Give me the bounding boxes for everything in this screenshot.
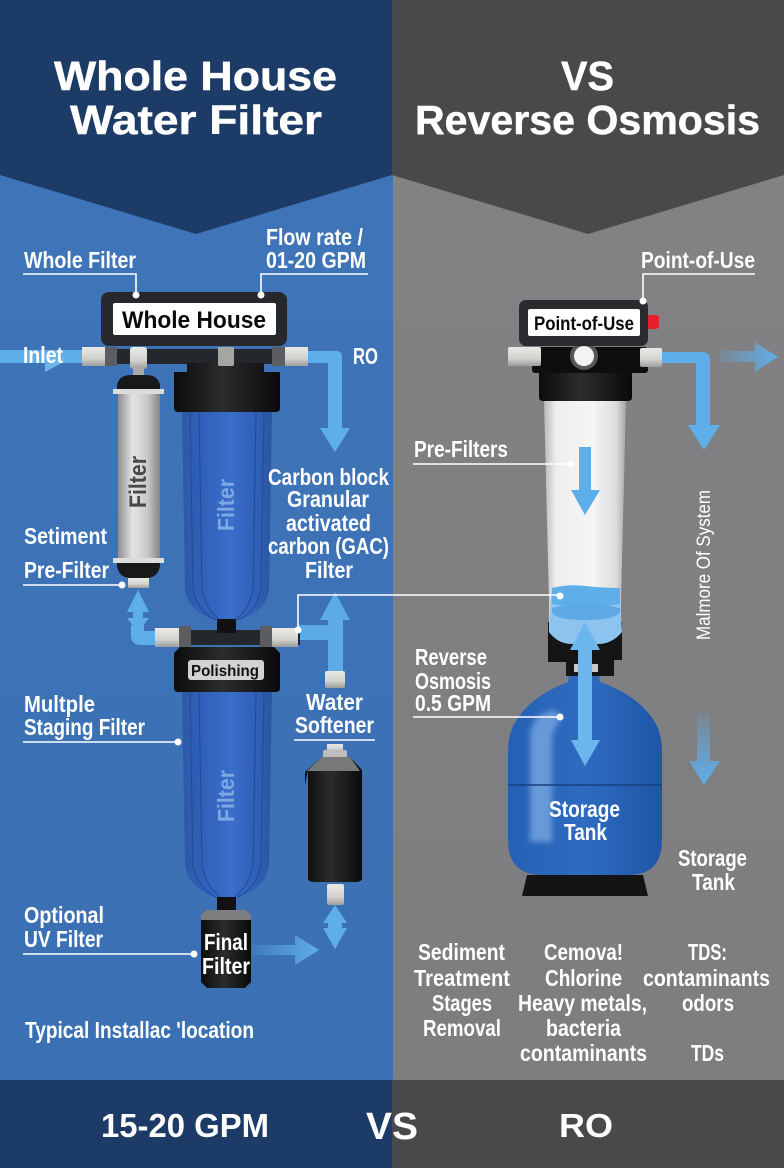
lower manifold	[155, 630, 300, 645]
table column: TDS: odors	[682, 990, 734, 1016]
label: storage tank: Tank	[692, 869, 735, 895]
footer band: right	[392, 1080, 784, 1168]
arrow: up into housing and down into tank	[570, 622, 600, 766]
callout: point-of-use: Point-of-Use	[641, 247, 755, 273]
title: whole house water filter: Whole House	[54, 53, 337, 99]
RO storage tank	[508, 673, 662, 896]
inlet flow pipe	[0, 350, 82, 372]
tank text: Storage	[549, 796, 620, 822]
tank highlight	[530, 710, 559, 842]
fittings	[508, 347, 541, 366]
RO outlet arrow down	[662, 352, 720, 450]
label: storage tank: Storage	[678, 845, 747, 871]
panel: reverse osmosis background	[393, 0, 784, 1168]
panel: whole house background	[0, 0, 393, 1168]
table column: removal: Chlorine	[545, 965, 622, 991]
black lower collar	[548, 622, 622, 676]
title: whole house water filter: Water Filter	[70, 97, 322, 143]
double flow arrow below pre-filter	[127, 590, 149, 632]
table column: sediment	[414, 939, 510, 1041]
callout: reverse osmosis flow: Reverse	[415, 644, 487, 670]
callout: flow rate: Flow rate /	[266, 224, 364, 250]
label: RO: RO	[353, 343, 378, 369]
head	[519, 300, 648, 346]
callout: reverse osmosis flow	[413, 644, 564, 720]
table column: removal: Heavy metals,	[518, 990, 647, 1016]
callout: pre-filters: Pre-Filters	[414, 436, 508, 462]
table column: sediment: Sediment	[418, 939, 505, 965]
final filter: Final	[204, 929, 248, 955]
callout: multiple staging filter	[23, 691, 182, 746]
table column: removal	[518, 939, 647, 1066]
callout: water softener	[294, 689, 375, 740]
sediment pre-filter: Filter	[125, 456, 152, 508]
callout: multiple staging filter: Staging Filter	[24, 714, 145, 740]
label: carbon block: Granular	[287, 486, 369, 512]
label: carbon block: Filter	[305, 557, 353, 583]
table column: sediment: Removal	[423, 1015, 501, 1041]
head label text: Whole House	[122, 307, 266, 334]
double arrow under softener	[323, 905, 347, 949]
label: typical installation location: Typical Installac 'location	[25, 1017, 254, 1043]
fittings	[82, 347, 308, 369]
red nub	[648, 315, 659, 329]
lower RO arrow	[689, 713, 720, 785]
title: vs reverse osmosis: Reverse Osmosis	[415, 97, 760, 143]
table column: removal: Cemova!	[544, 939, 623, 965]
polishing text: Polishing	[191, 663, 259, 680]
table column: TDS	[643, 939, 770, 1066]
arrow out of final filter	[252, 935, 319, 965]
callout: water softener: Water	[306, 689, 363, 715]
RO outlet arrow right	[720, 342, 778, 372]
clear housing	[544, 400, 626, 643]
tank base	[522, 875, 648, 896]
final filter	[201, 897, 251, 988]
manifold pipe	[85, 349, 305, 364]
table column: sediment: Treatment	[414, 965, 510, 991]
callout: flow rate	[258, 224, 368, 298]
label: carbon block: carbon (GAC)	[268, 533, 389, 559]
label: storage tank	[678, 845, 747, 895]
label: carbon block	[268, 464, 389, 583]
footer: RO: RO	[559, 1107, 613, 1144]
callout: flow rate: 01-20 GPM	[266, 247, 366, 273]
title: whole house water filter	[54, 53, 337, 143]
footer band: left	[0, 1080, 392, 1168]
table column: TDS: TDs	[691, 1040, 724, 1066]
RO storage tank: Tank	[564, 819, 607, 845]
lower fittings	[155, 626, 298, 647]
callout: pre-filters	[413, 436, 574, 468]
whole house filter assembly	[82, 292, 308, 620]
footer: VS: VS	[366, 1106, 418, 1148]
head text: Point-of-Use	[534, 314, 634, 335]
table column: sediment: Stages	[432, 990, 492, 1016]
small pipe from pre-filter	[131, 625, 158, 645]
callout: optional UV filter: UV Filter	[24, 926, 103, 952]
head plate	[528, 309, 640, 336]
final filter: Filter	[202, 953, 250, 979]
footer: flow rate: 15-20 GPM	[101, 1107, 269, 1144]
callout: sediment pre-filter	[23, 523, 126, 588]
label: filter on main body: Filter	[213, 479, 239, 531]
long link line to lower manifold	[294, 592, 564, 634]
head unit	[101, 292, 287, 346]
header banner: left	[0, 0, 392, 234]
callout: reverse osmosis flow: 0.5 GPM	[415, 690, 491, 716]
cap	[539, 370, 632, 401]
label: carbon block: activated	[286, 510, 371, 536]
callout: whole filter	[23, 247, 140, 298]
callout: whole filter: Whole Filter	[24, 247, 136, 273]
callout: optional UV filter	[23, 902, 198, 958]
title: vs reverse osmosis	[415, 53, 760, 143]
sediment pre-filter	[113, 366, 164, 588]
table column: removal: bacteria	[546, 1015, 621, 1041]
main filter body	[182, 410, 272, 620]
title: vs reverse osmosis: VS	[561, 53, 614, 99]
main filter cap	[174, 363, 280, 412]
head label plate	[113, 303, 276, 335]
callout: sediment pre-filter: Pre-Filter	[24, 557, 109, 583]
label: carbon block: Carbon block	[268, 464, 389, 490]
callout: point-of-use	[640, 247, 755, 304]
table column: TDS: TDS:	[688, 939, 727, 965]
polishing filter assembly	[155, 619, 300, 897]
callout: multiple staging filter: Multple	[24, 691, 95, 717]
table column: removal: contaminants	[520, 1040, 647, 1066]
RO filter housing	[508, 300, 662, 676]
arrow: pre-filter down	[571, 447, 600, 515]
riser fitting above softener	[325, 671, 345, 688]
lower right riser arrow	[298, 592, 350, 674]
water softener tank	[305, 744, 362, 905]
callout: reverse osmosis flow: Osmosis	[415, 668, 491, 694]
lower filter body	[182, 690, 272, 897]
header banner: right	[392, 0, 784, 234]
water in housing	[549, 585, 622, 644]
body ribs	[190, 412, 264, 620]
label: inlet: Inlet	[23, 342, 63, 368]
callout: sediment pre-filter: Setiment	[24, 523, 107, 549]
callout: water softener: Softener	[295, 712, 374, 738]
tank seam	[508, 784, 662, 786]
vertical label: system: Malmore Of System	[694, 490, 715, 640]
RO outlet pipe arrow	[306, 351, 350, 452]
lower cap	[174, 647, 280, 692]
callout: optional UV filter: Optional	[24, 902, 104, 928]
lower filter text: Filter	[213, 770, 239, 822]
polishing plate	[188, 660, 264, 680]
manifold	[532, 347, 648, 373]
